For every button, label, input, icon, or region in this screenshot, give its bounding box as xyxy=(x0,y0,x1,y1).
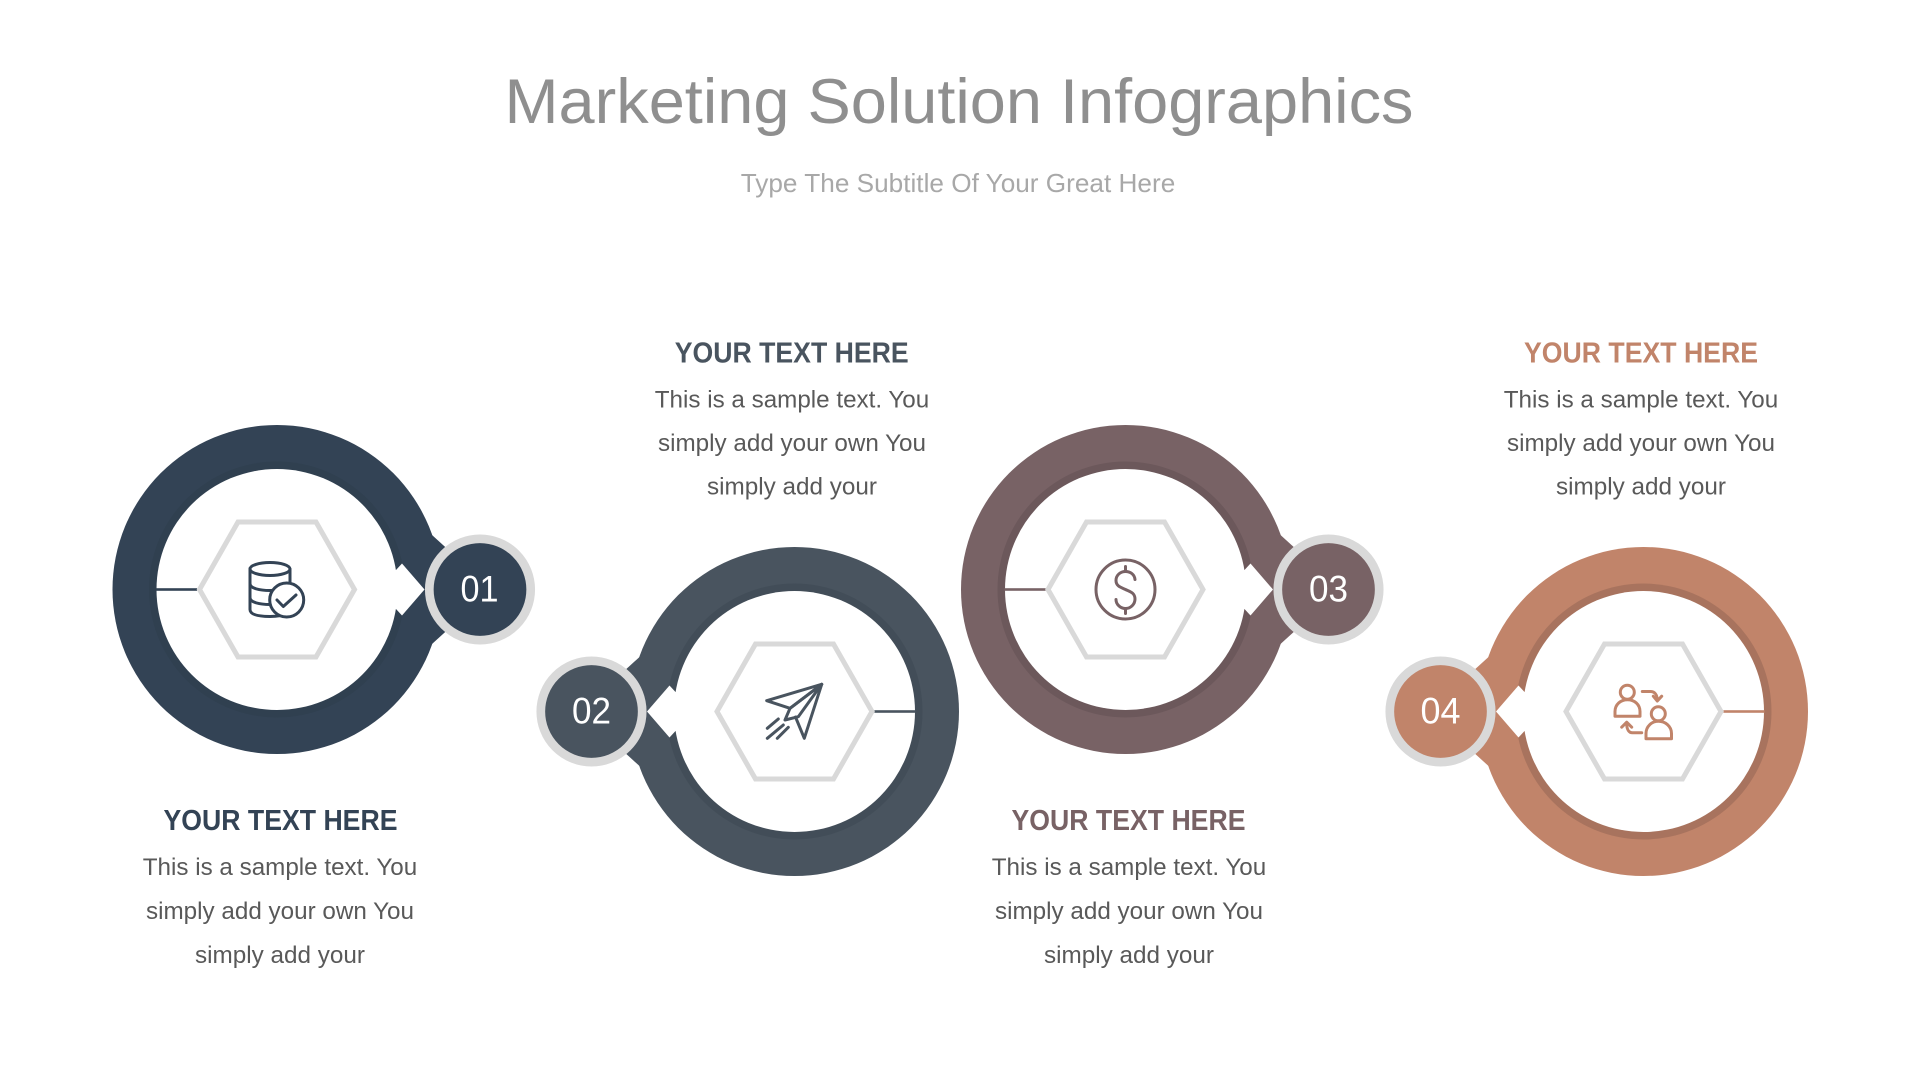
step 04 text: This is a sample text. You xyxy=(1504,386,1778,414)
ring 03 xyxy=(961,425,1318,754)
step 03 text: YOUR TEXT HERE xyxy=(1012,805,1246,837)
step 01 text xyxy=(143,805,417,969)
step 03 text: simply add your own You xyxy=(995,898,1263,925)
step 04 text: simply add your xyxy=(1556,474,1726,500)
number badge 03 xyxy=(1278,539,1379,640)
step 02 text: This is a sample text. You xyxy=(655,386,929,414)
icon: two people exchanging xyxy=(1615,685,1672,739)
number badge 01 xyxy=(429,539,531,640)
connector line 03 xyxy=(1004,588,1046,591)
ring 02 xyxy=(602,547,959,876)
step 01 text: YOUR TEXT HERE xyxy=(164,805,398,837)
icon: database with check xyxy=(250,562,304,617)
ring 01 xyxy=(112,425,470,754)
step 04 text: YOUR TEXT HERE xyxy=(1524,338,1758,370)
step 02 text: YOUR TEXT HERE xyxy=(675,338,909,370)
subtitle: Type The Subtitle Of Your Great Here xyxy=(741,168,1175,198)
hexagon 02 xyxy=(717,644,872,779)
step 03 graphic xyxy=(961,425,1379,754)
number badge 04 xyxy=(1390,661,1491,762)
step 03 text xyxy=(992,805,1266,969)
step 04 graphic xyxy=(1390,547,1808,876)
number badge 02: 02 xyxy=(572,690,611,732)
step 01 graphic xyxy=(112,425,531,754)
connector line 01 xyxy=(156,588,197,591)
step 01 text: simply add your xyxy=(195,942,365,969)
step 04 text xyxy=(1504,338,1778,500)
number badge 01: 01 xyxy=(460,568,498,610)
connector line 02 xyxy=(874,710,916,713)
hexagon 04 xyxy=(1566,644,1721,779)
hexagon 01 xyxy=(200,522,354,657)
number badge 04: 04 xyxy=(1420,690,1460,732)
step 04 text: simply add your own You xyxy=(1507,430,1775,457)
connector line 04 xyxy=(1724,710,1764,713)
title: Marketing Solution Infographics xyxy=(504,67,1414,137)
step 02 text xyxy=(655,338,929,500)
number badge 03: 03 xyxy=(1309,568,1348,610)
step 02 graphic xyxy=(541,547,959,876)
icon: paper plane xyxy=(767,684,822,738)
number badge 02 xyxy=(541,661,642,762)
step 01 text: simply add your own You xyxy=(146,898,414,925)
icon: dollar coin xyxy=(1096,560,1155,619)
step 02 text: simply add your own You xyxy=(658,430,926,457)
ring 04 xyxy=(1450,547,1808,876)
step 01 text: This is a sample text. You xyxy=(143,854,417,881)
step 02 text: simply add your xyxy=(707,474,877,500)
hexagon 03 xyxy=(1048,522,1203,657)
step 03 text: This is a sample text. You xyxy=(992,854,1266,881)
step 03 text: simply add your xyxy=(1044,942,1214,969)
